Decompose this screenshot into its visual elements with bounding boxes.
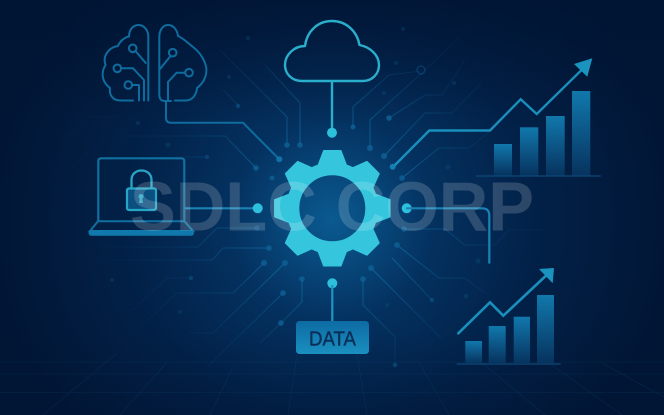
laptop connector [185,203,263,213]
lower chart connector [402,203,489,263]
circuit ring node [417,66,425,74]
brain connector wire [166,102,279,159]
icon: laptop with lock [88,158,194,236]
node: cloud connector dot [327,128,337,138]
data box: DATA [309,328,357,350]
data connector [327,278,337,321]
floor grid [0,353,664,415]
icon: upper growth chart [390,58,601,176]
node: brain connector dot [276,156,282,162]
lock icon [127,170,156,210]
watermark: SDLC CORP [130,168,534,246]
data box [296,321,369,354]
background circuit traces [60,37,545,367]
circuit node dots [189,104,434,367]
cloud connector [331,81,333,128]
icon: cloud [285,21,379,128]
icon: central gear [275,151,390,266]
icon: brain [103,25,279,159]
icon: lower growth chart [457,268,561,364]
